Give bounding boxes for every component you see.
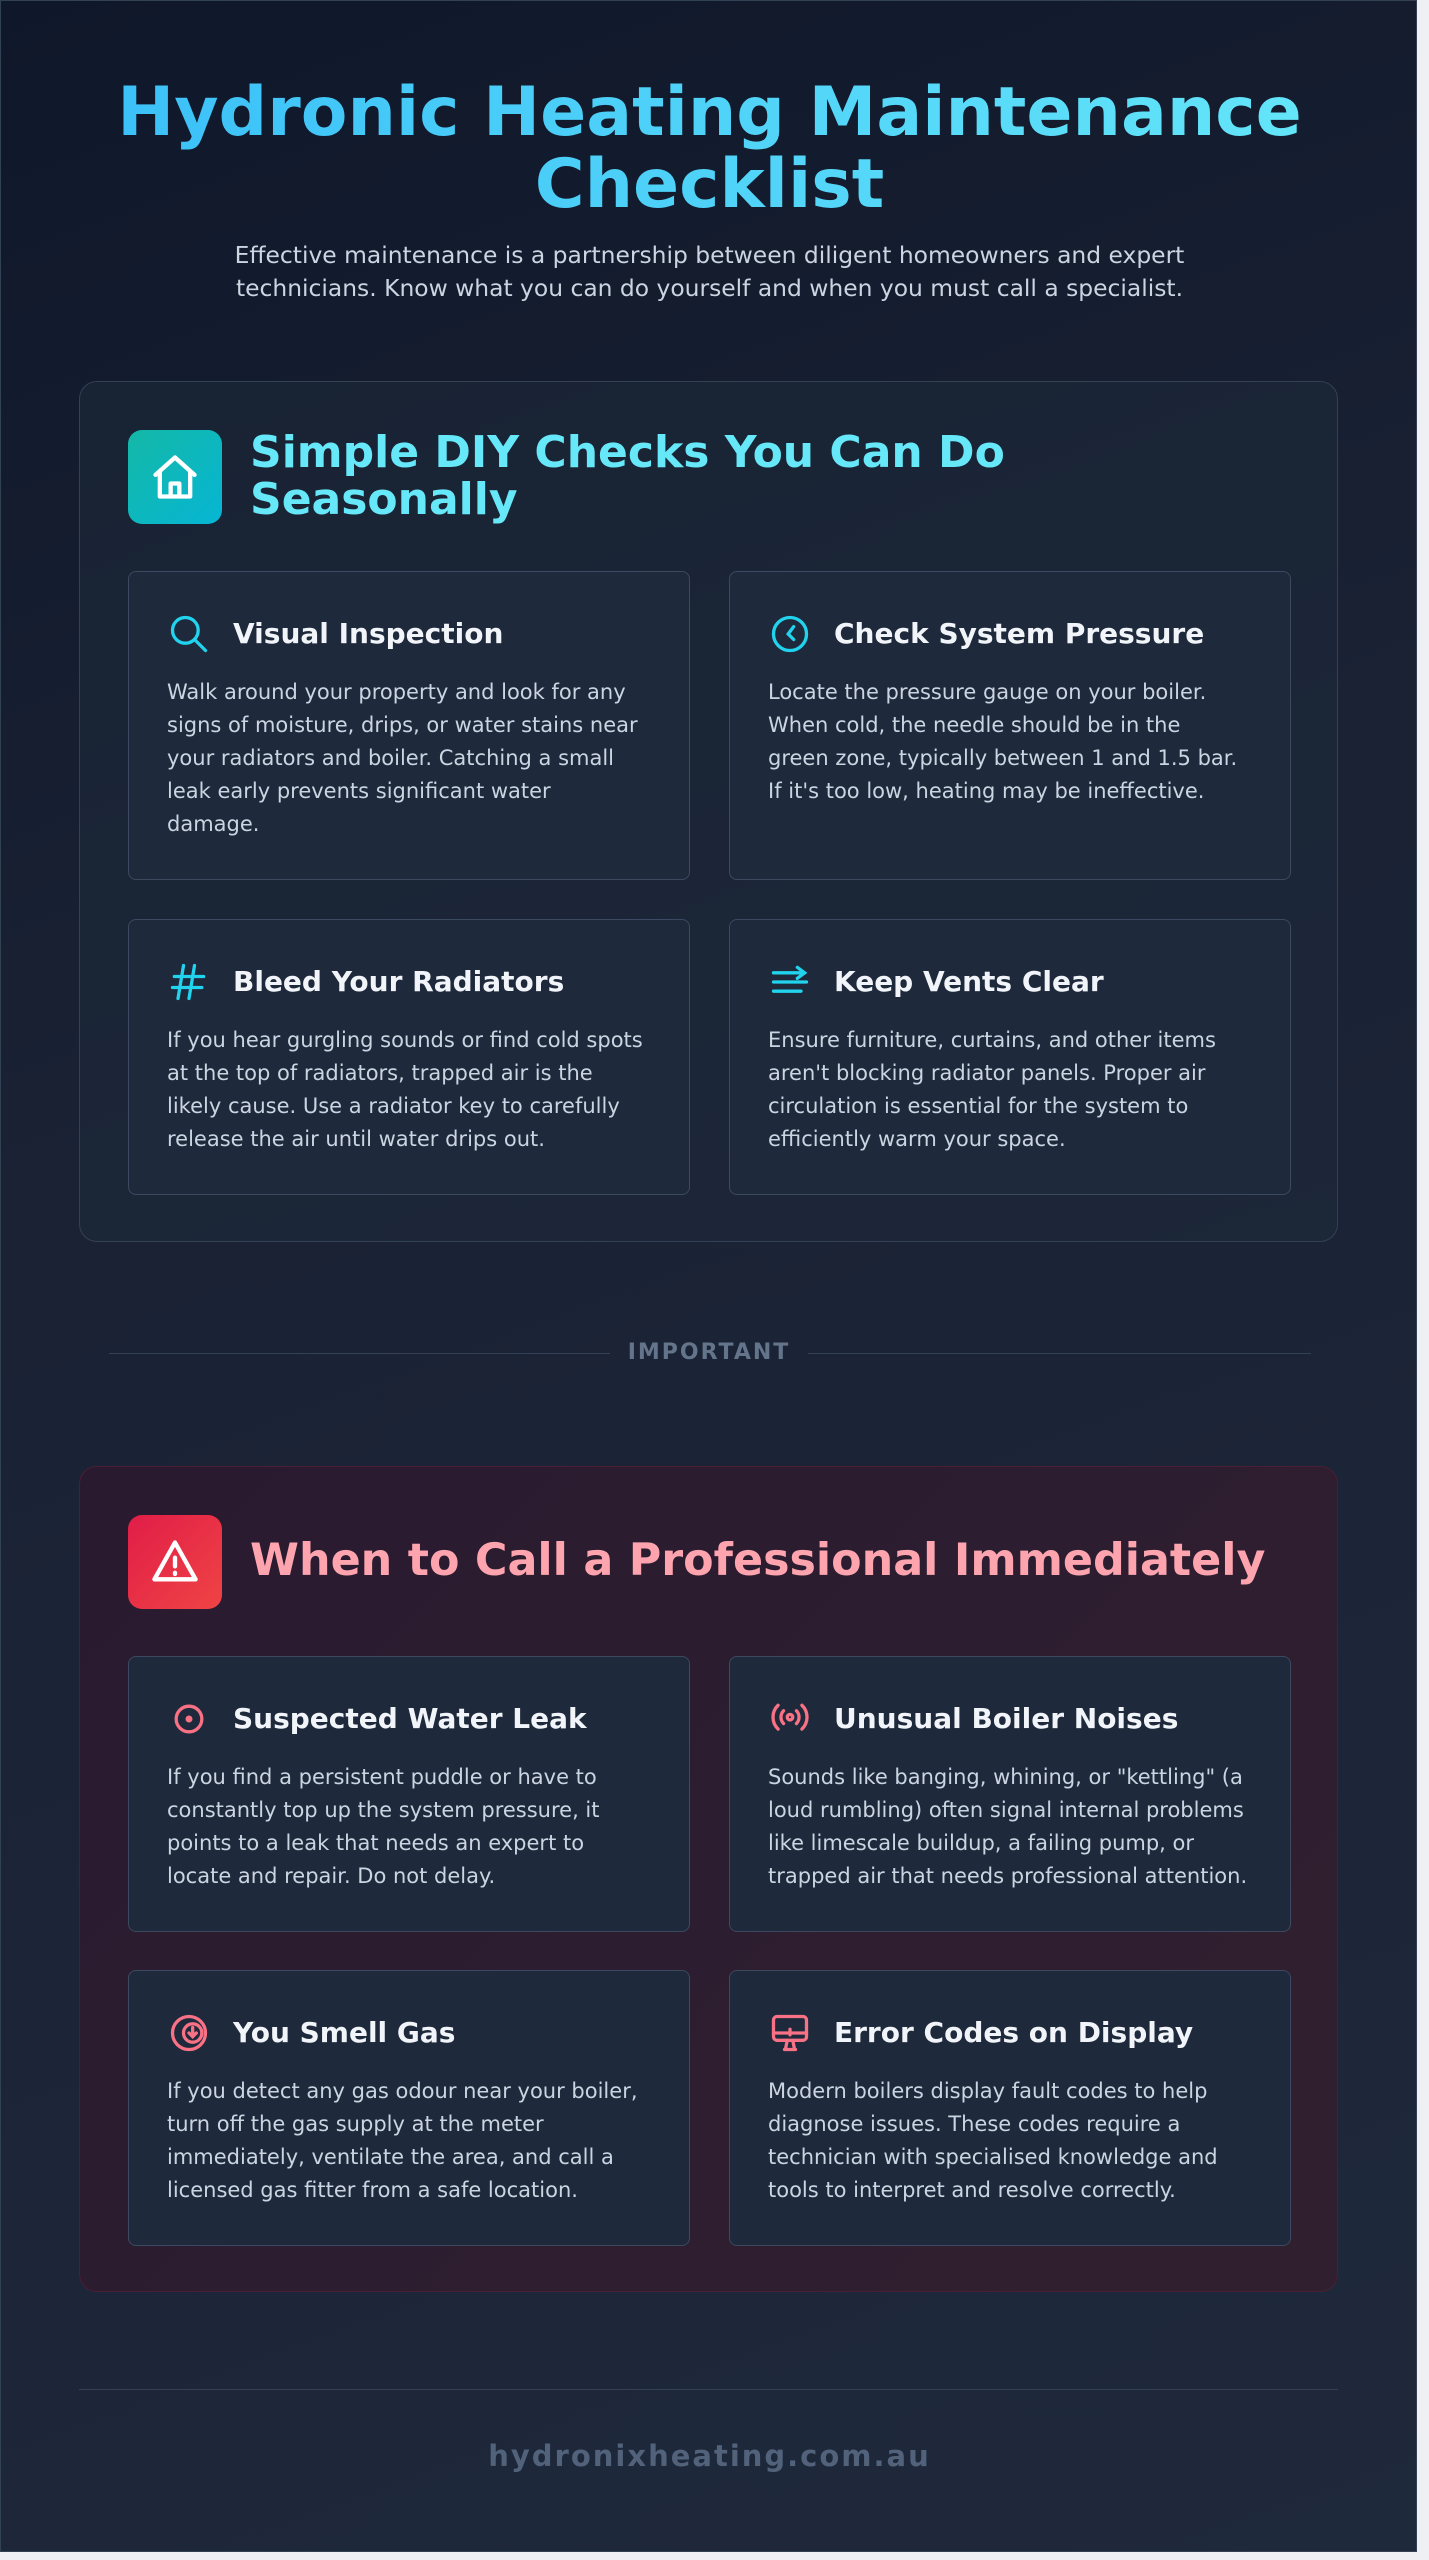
card: gas: If you detect any gas odour near your boiler, turn off the gas supply at the meter immediately, ventilate the area, and call a licensed gas fitter from a safe location. — [167, 2079, 638, 2202]
card: pressure: Locate the pressure gauge on your boiler. When cold, the needle should be in the green zone, typically between 1 and 1.5 bar. If it's too low, heating may be ineffective. — [768, 680, 1237, 803]
heading: DIY: Simple DIY Checks You Can Do — [250, 427, 1005, 478]
card: gas — [128, 1970, 690, 2246]
icon: monitor — [772, 2014, 808, 2052]
card: noises: Unusual Boiler Noises — [834, 1702, 1178, 1735]
icon: sound waves — [771, 1704, 809, 1731]
card: visual inspection: Walk around your property and look for any signs of moisture, drips, or water stains near your radiators and boiler. Catching a small leak early prevents significant water damage. — [167, 680, 638, 836]
card: bleed radiators: Bleed Your Radiators — [233, 965, 564, 998]
icon: radiator — [170, 964, 206, 1000]
card: error codes: Modern boilers display fault codes to help diagnose issues. These codes require a technician with specialised knowledge and tools to interpret and resolve correctly. — [768, 2079, 1218, 2202]
icon: warning — [128, 1515, 222, 1609]
card: bleed radiators: If you hear gurgling sounds or find cold spots at the top of radiators, trapped air is the likely cause. Use a radiator key to carefully release the air until water drips out. — [167, 1028, 643, 1151]
icon: gauge — [772, 616, 808, 652]
title — [1, 77, 1418, 221]
card: water leak: Suspected Water Leak — [233, 1702, 587, 1735]
icon: house — [128, 430, 222, 524]
divider: important: IMPORTANT — [628, 1340, 790, 1365]
title: Checklist — [535, 145, 884, 224]
card: visual inspection: Visual Inspection — [233, 617, 503, 650]
card: visual inspection — [128, 571, 690, 880]
subtitle: Effective maintenance is a partnership between diligent homeowners and expert technicians. Know what you can do yourself and when you must call a specialist. — [235, 241, 1184, 302]
icon: flame circle — [170, 2014, 208, 2052]
panel: DIY checks — [79, 381, 1338, 1242]
card: water leak — [128, 1656, 690, 1932]
icon: airflow — [772, 966, 808, 993]
card: pressure — [729, 571, 1291, 880]
card: vents — [729, 919, 1291, 1195]
heading: professional: When to Call a Professional Immediately — [250, 1535, 1265, 1586]
title: Hydronic Heating Maintenance — [117, 73, 1302, 152]
card: vents: Keep Vents Clear — [834, 965, 1104, 998]
card: noises: Sounds like banging, whining, or "kettling" (a loud rumbling) often signal internal problems like limescale buildup, a failing pump, or trapped air that needs professional attention. — [768, 1765, 1247, 1888]
card: error codes — [729, 1970, 1291, 2246]
icon: magnifier — [170, 616, 208, 652]
card: error codes: Error Codes on Display — [834, 2016, 1193, 2049]
heading: DIY: Seasonally — [250, 474, 518, 525]
card: bleed radiators — [128, 919, 690, 1195]
footer: website: hydronixheating.com.au — [488, 2439, 931, 2473]
card: vents: Ensure furniture, curtains, and other items aren't blocking radiator panels. Proper air circulation is essential for the system to efficiently warm your space. — [768, 1028, 1216, 1151]
card: noises — [729, 1656, 1291, 1932]
heading: DIY — [250, 427, 1005, 525]
footer divider — [79, 2389, 1338, 2390]
icon: drop target — [174, 1704, 204, 1734]
card: pressure: Check System Pressure — [834, 617, 1204, 650]
panel: call a professional — [79, 1466, 1338, 2292]
card: gas: You Smell Gas — [233, 2016, 455, 2049]
card: water leak: If you find a persistent puddle or have to constantly top up the system pressure, it points to a leak that needs an expert to locate and repair. Do not delay. — [167, 1765, 600, 1888]
